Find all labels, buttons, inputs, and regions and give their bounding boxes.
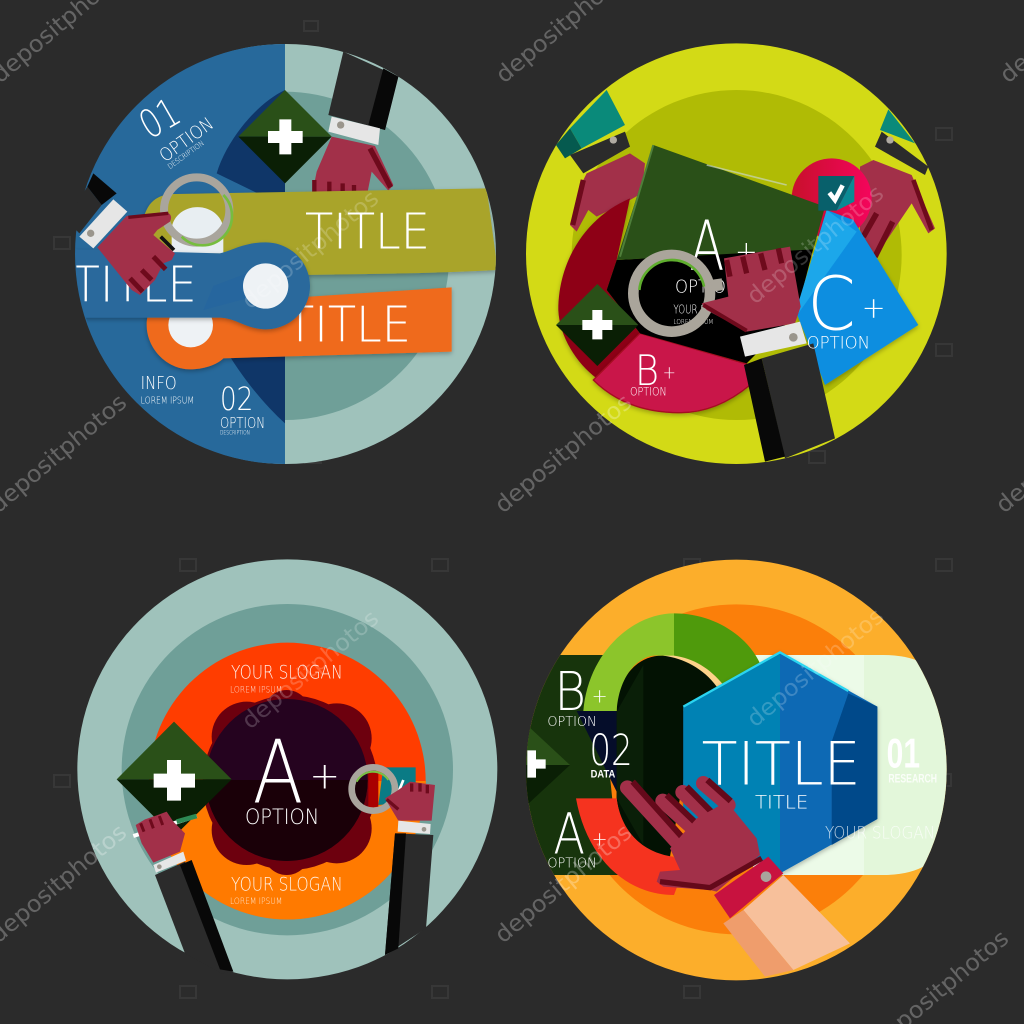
option 01 label: 01 (131, 89, 188, 149)
black sector (607, 248, 813, 363)
right sleeve (385, 833, 433, 955)
B option text: B (554, 660, 586, 723)
black disc (617, 656, 727, 857)
orange band (147, 282, 452, 369)
pale band (753, 655, 953, 875)
A option text: OPTION (547, 857, 597, 872)
top slogan: LOREM IPSUM (230, 685, 282, 695)
panel: lime circle with A B C options (526, 43, 947, 464)
circle base (75, 44, 496, 464)
option 02 label (220, 380, 265, 437)
hand with peach sleeve (627, 780, 850, 977)
bottom slogan (230, 875, 343, 907)
green arc (583, 613, 760, 711)
option 02 label: OPTION (220, 414, 265, 432)
blue band (72, 242, 310, 329)
A option text: + (309, 754, 340, 798)
B option text: B (635, 346, 659, 395)
navy shape (577, 711, 683, 798)
A option text: YOUR SLOGAN (673, 301, 737, 316)
ring (164, 177, 232, 245)
A option text: OPTION (245, 805, 319, 830)
A option text: LOREM IPSUM (673, 318, 713, 326)
A option text: + (592, 828, 608, 851)
dark green band (520, 655, 620, 875)
hand right (385, 782, 435, 834)
option 02 label: DESCRIPTION (220, 430, 250, 437)
diamond with plus icon (238, 90, 332, 183)
bottom slogan: LOREM IPSUM (230, 897, 282, 907)
watermarks: depositphotos (742, 180, 889, 310)
pale disc under ring (172, 207, 223, 253)
B option text: + (592, 684, 608, 707)
circle base (526, 43, 947, 464)
left sleeve (155, 860, 233, 973)
teal check badge (368, 767, 416, 808)
hand top right (312, 52, 398, 197)
hand left (67, 173, 175, 295)
panel: orange circle with hexagon (520, 560, 953, 980)
hexagon (683, 652, 877, 873)
A option text (245, 722, 340, 830)
B option text: + (663, 363, 676, 383)
B option text (630, 346, 676, 399)
peach sliver (663, 653, 725, 687)
hand upper left (556, 90, 645, 232)
A option text (547, 802, 608, 872)
red top circle (792, 158, 872, 238)
hexagon title: TITLE (702, 729, 861, 798)
option 01 label: DESCRIPTION (166, 139, 206, 171)
watermarks: depositphotos (490, 389, 637, 519)
panel: blue circle with title bands (67, 44, 498, 464)
C option text (807, 261, 886, 352)
hexagon title: TITLE (755, 792, 808, 813)
diamond with plus icon (556, 284, 638, 366)
red pie sector (558, 198, 640, 378)
A option text: A (253, 722, 303, 824)
blue kite (797, 210, 918, 385)
info label: LOREM IPSUM (141, 396, 194, 407)
dark flower centre (203, 690, 377, 875)
circle base (526, 560, 947, 980)
data label: DATA (591, 769, 616, 781)
green panel (617, 145, 825, 260)
C option text: + (862, 290, 886, 324)
top slogan (230, 663, 343, 695)
info label: INFO (141, 374, 177, 394)
yellow band title: TITLE (305, 204, 430, 260)
ring (352, 767, 395, 811)
pen and hand left (133, 812, 197, 873)
option 01 label (131, 89, 218, 171)
option 01 label: OPTION (156, 113, 218, 167)
teal check badge (818, 176, 854, 211)
ring (633, 255, 723, 332)
A option text (673, 207, 758, 326)
research label: RESEARCH (888, 772, 937, 786)
B option text: OPTION (630, 385, 667, 399)
red arc (576, 798, 683, 895)
hand upper right (860, 109, 935, 260)
B option text (547, 660, 608, 730)
pink pie sector (593, 333, 750, 413)
diamond with plus icon (117, 722, 232, 837)
concentric circles (77, 559, 497, 979)
watermarks: depositphotos (237, 605, 384, 735)
C option text: OPTION (807, 333, 870, 352)
A option text: A (553, 802, 585, 867)
research label: 01 (887, 730, 920, 777)
option 02 label: 02 (220, 380, 253, 418)
watermarks: depositphotos (742, 603, 889, 733)
blue band: TITLE (72, 258, 197, 314)
slogan: YOUR SLOGAN (825, 823, 935, 842)
bottom slogan: YOUR SLOGAN (231, 875, 343, 896)
watermarks: depositphotos (237, 185, 384, 315)
A option text: A (689, 207, 724, 286)
orange band title: TITLE (286, 298, 411, 354)
panel: teal circle with slogans (77, 559, 497, 979)
data label: 02 (589, 726, 633, 776)
watermarks: depositphotos (490, 819, 637, 949)
top slogan: YOUR SLOGAN (231, 663, 343, 684)
yellow band (144, 188, 498, 275)
info label (141, 374, 194, 407)
C option text: C (807, 261, 856, 347)
A option text: OPTION (675, 278, 738, 298)
A option text: + (735, 235, 758, 270)
B option text: OPTION (547, 715, 597, 730)
hand centre (702, 247, 835, 462)
